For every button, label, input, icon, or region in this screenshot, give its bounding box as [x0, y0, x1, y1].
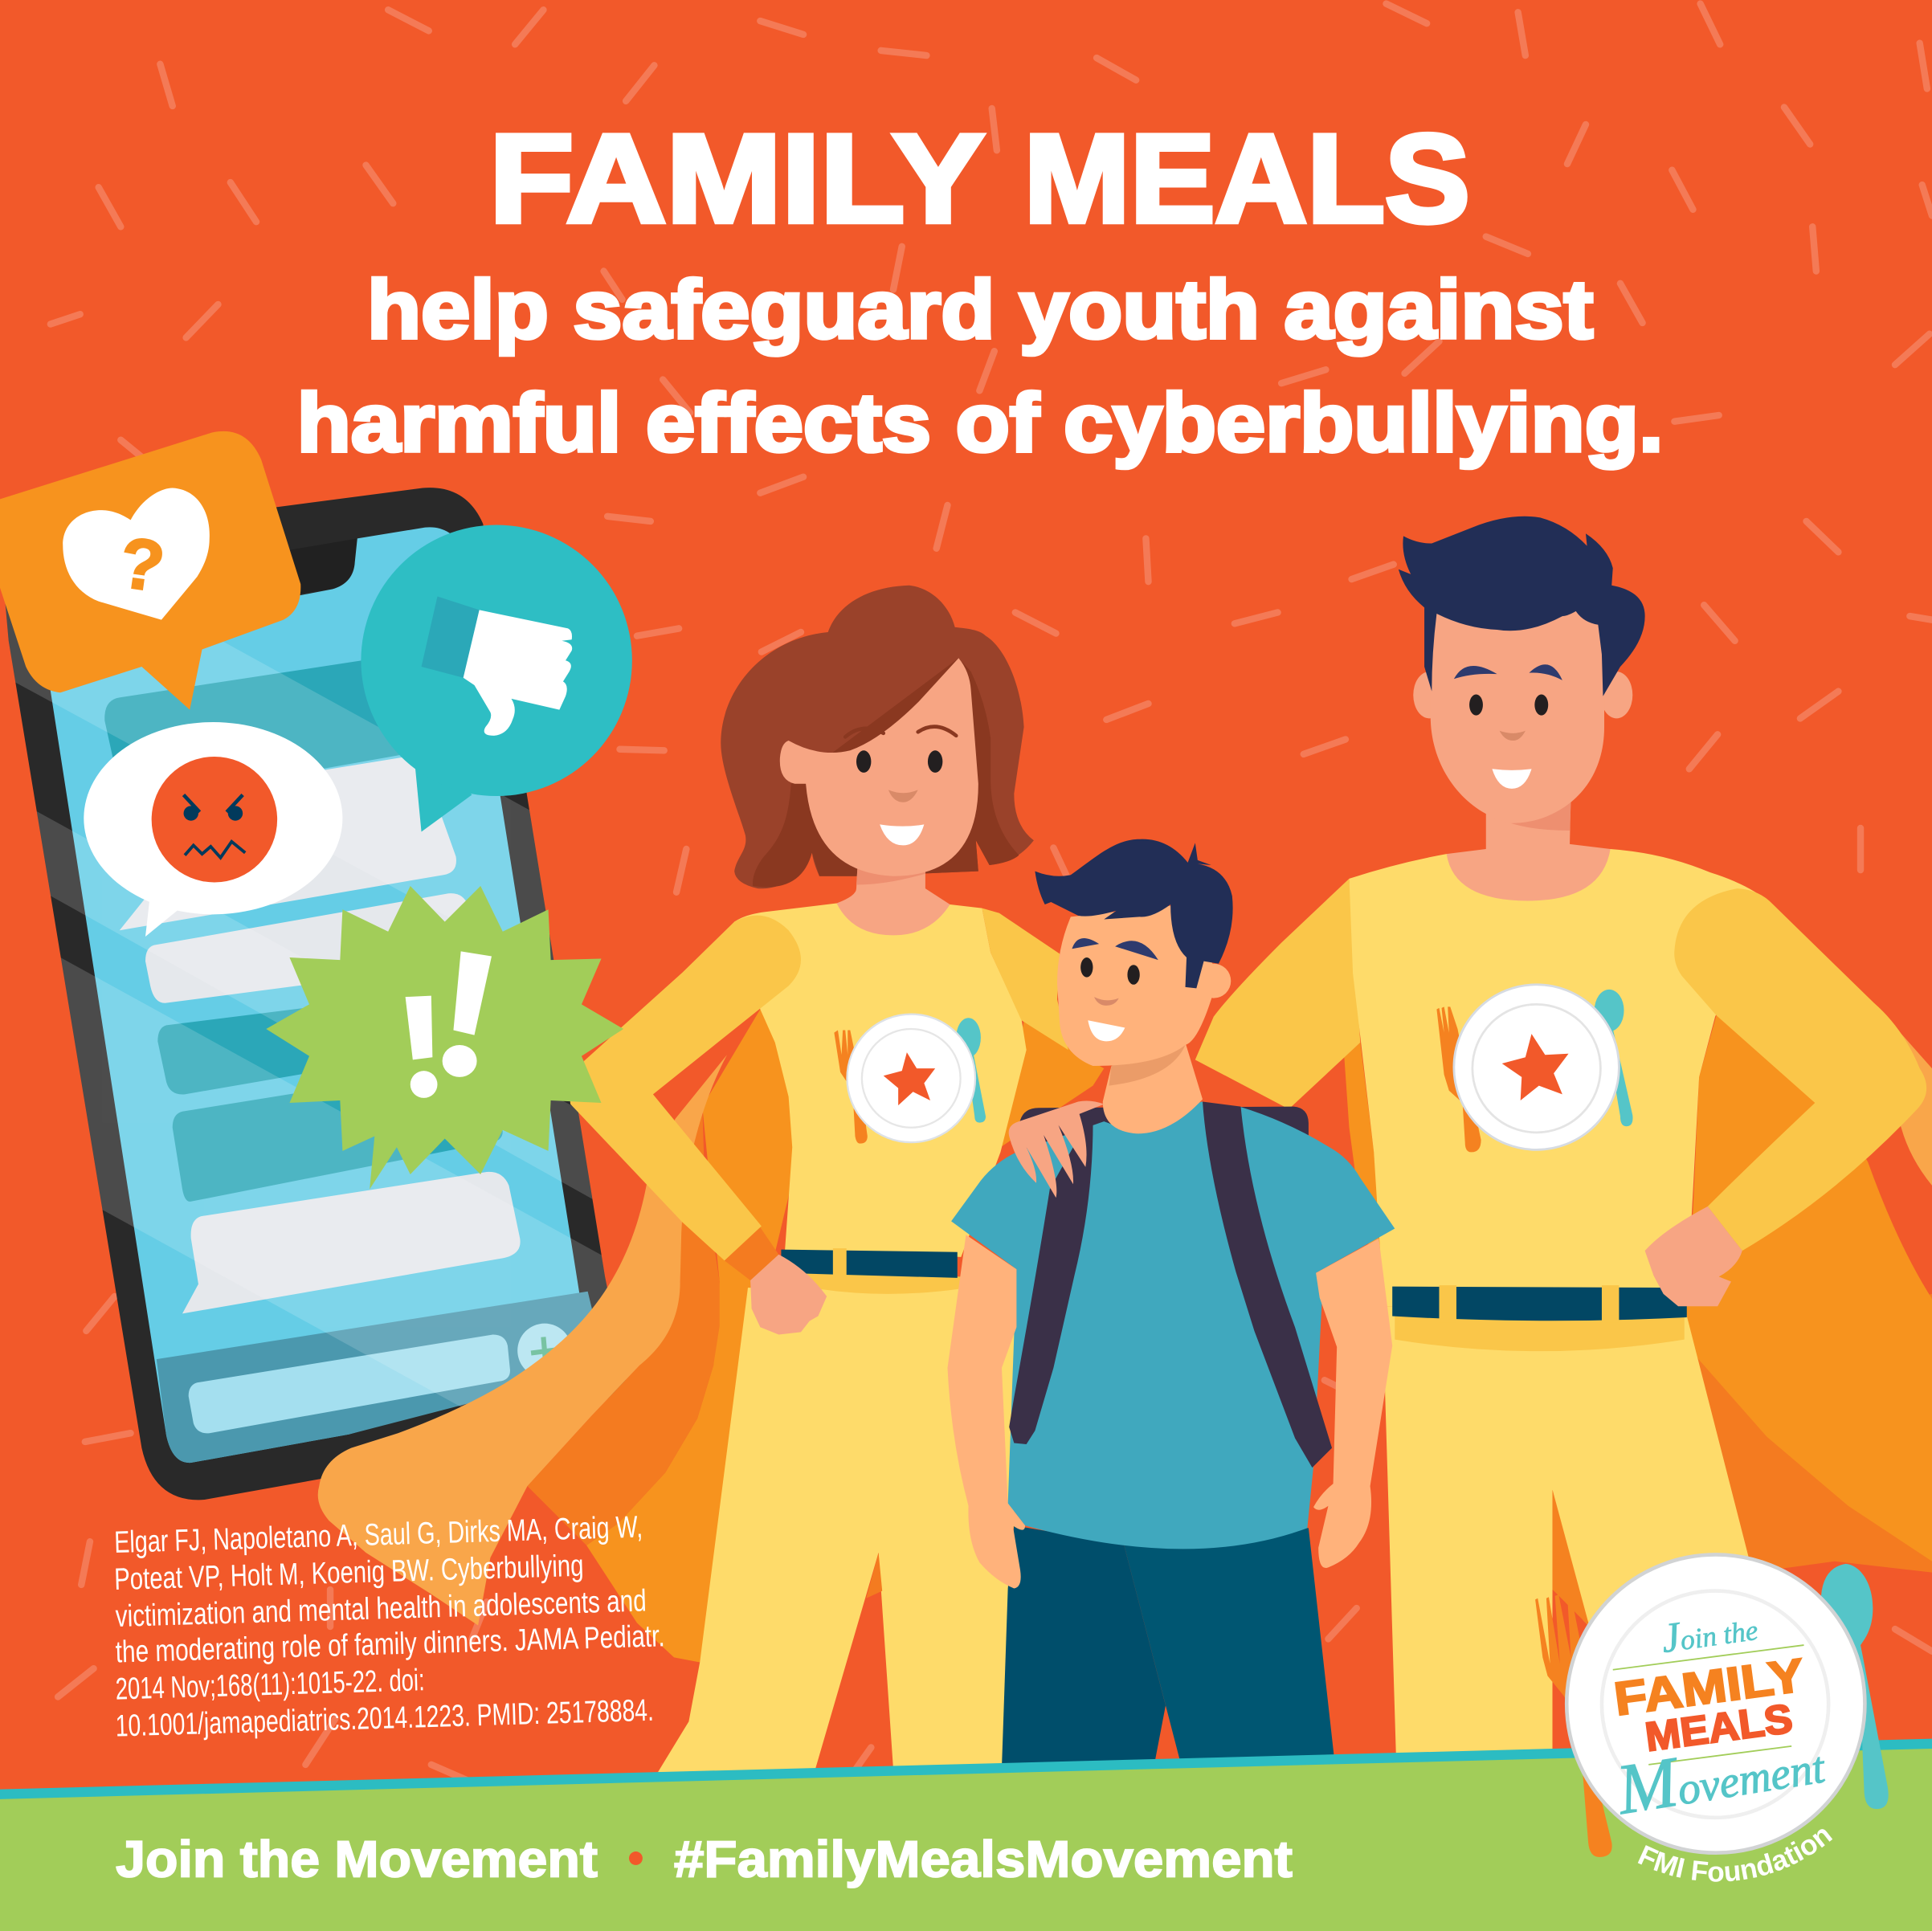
chat bubble teal 5	[173, 1062, 503, 1202]
logo fork	[1535, 1594, 1612, 1857]
title	[489, 108, 1470, 249]
phone screen	[37, 527, 591, 1463]
boy arms	[947, 1235, 1392, 1589]
speech bubble: angry face	[84, 722, 342, 937]
woman far sleeve	[982, 908, 1068, 1050]
woman shirt	[734, 904, 1027, 1257]
movement logo	[1535, 1553, 1889, 1882]
man head	[1399, 516, 1645, 823]
citation: Poteat VP, Holt M, Koenig BW. Cyberbullying	[114, 1549, 584, 1597]
woman hand on boy shoulder	[1009, 1100, 1104, 1198]
logo foundation arc: FMI Foundation	[1637, 1829, 1833, 1882]
man shirt emblem	[1436, 985, 1633, 1152]
citation: the moderating role of family dinners. JAMA Pediatr.	[115, 1619, 665, 1670]
cape: man left	[1344, 1043, 1387, 1306]
man arm	[1645, 888, 1926, 1306]
screen glare bands	[5, 604, 623, 1407]
woman neck	[836, 867, 950, 935]
figure: boy	[947, 839, 1395, 1768]
logo rules	[1613, 1645, 1803, 1765]
composer input	[189, 1334, 510, 1433]
starburst alert	[266, 886, 623, 1189]
man far arm	[1195, 879, 1360, 1109]
phone body	[0, 488, 628, 1500]
phone illustration	[0, 488, 641, 1506]
footer call to action	[116, 1830, 1293, 1888]
chat bubble grey 6	[182, 1172, 521, 1313]
woman face	[780, 658, 978, 876]
chat bubble grey 3	[145, 893, 487, 1003]
logo spoon	[1821, 1564, 1889, 1809]
speech bubble: heart question: ?	[115, 521, 170, 607]
cape: woman dark	[527, 1107, 720, 1545]
phone notch	[277, 538, 357, 595]
subtitle line 1: help safeguard youth against	[367, 263, 1593, 355]
boy head	[1035, 839, 1233, 1066]
backpack	[1019, 1107, 1309, 1183]
boy trousers	[1002, 1525, 1334, 1768]
citation: 10.1001/jamapediatrics.2014.1223. PMID: 25178884.	[115, 1693, 654, 1744]
man trousers	[1383, 1306, 1775, 1755]
chat bubble grey 2	[120, 757, 456, 930]
man neck	[1447, 789, 1611, 900]
woman shirt emblem	[834, 1014, 986, 1144]
cape: woman light	[318, 1055, 727, 1626]
woman arm	[570, 916, 827, 1334]
composer bar	[157, 1292, 607, 1463]
logo join the: Join the	[1658, 1603, 1760, 1662]
chat bubble teal 4	[157, 986, 493, 1094]
title: FAMILY	[489, 108, 985, 249]
man shirt	[1350, 849, 1771, 1306]
plus button	[517, 1324, 572, 1378]
subtitle line 2: harmful effects of cyberbullying.	[297, 376, 1664, 468]
speech bubble: heart question	[0, 431, 300, 710]
citation	[114, 1510, 665, 1744]
cape: woman right shoulder	[1000, 1022, 1104, 1147]
woman hair	[721, 586, 1034, 888]
logo movement: Movement	[1610, 1720, 1830, 1830]
cape: woman bright	[586, 1009, 794, 1663]
ground band	[0, 1739, 1932, 1931]
footer call to action: #FamilyMealsMovement	[674, 1830, 1293, 1888]
citation: Elgar FJ, Napoletano A, Saul G, Dirks MA, Craig W,	[114, 1510, 643, 1560]
figure: woman	[570, 586, 1068, 1772]
chat bubble teal 1	[104, 659, 419, 801]
figure: man	[1195, 516, 1926, 1755]
logo plate	[1566, 1554, 1865, 1853]
footer call to action: Join the Movement	[116, 1830, 598, 1888]
man belt	[1392, 1285, 1687, 1351]
woman trousers	[658, 1288, 1023, 1772]
boy neck	[1103, 1043, 1203, 1133]
woman belt	[781, 1248, 961, 1294]
capes	[318, 1003, 1932, 1663]
citation: 2014 Nov;168(11):1015-22. doi:	[115, 1663, 425, 1707]
speech bubble: thumbs down	[361, 525, 632, 832]
boy backpack straps	[1009, 1102, 1332, 1468]
citation: victimization and mental health in adolescents and	[115, 1583, 647, 1634]
logo family: FAMILY	[1611, 1649, 1807, 1725]
logo meals: MEALS	[1643, 1695, 1795, 1760]
boy t-shirt	[951, 1102, 1395, 1549]
title: MEALS	[1024, 108, 1470, 249]
cape: man right	[1694, 1294, 1932, 1573]
